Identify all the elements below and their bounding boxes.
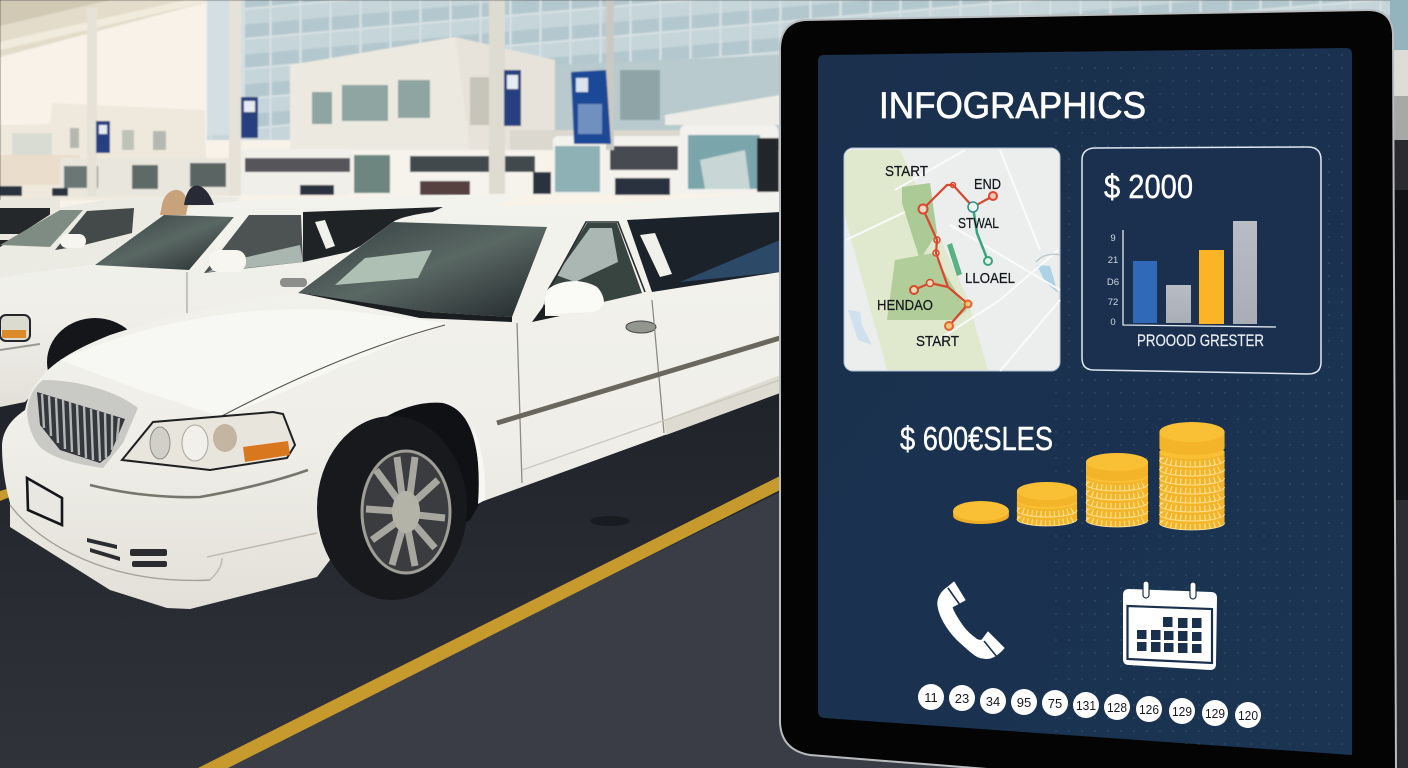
side mirror (542, 281, 604, 315)
tablet screen (818, 48, 1352, 755)
calendar date badges: 75 (1048, 696, 1062, 711)
calendar date badges: 131 (1076, 698, 1096, 713)
blue wayfinding signs (96, 70, 611, 153)
tablet frame (780, 10, 1396, 768)
coin stack 3 (1086, 453, 1148, 527)
map labels: HENDAO (877, 297, 933, 314)
map labels: START (916, 333, 959, 350)
y axis labels: 21 (1108, 255, 1118, 266)
y axis labels: 0 (1110, 317, 1116, 328)
chart caption: PROOOD GRESTER (1137, 331, 1264, 350)
low distant building (0, 103, 207, 200)
canopy roof (0, 0, 215, 57)
yellow kerb line (198, 476, 780, 768)
calendar date badges: 23 (955, 691, 969, 706)
white terminal block (207, 0, 780, 150)
sales heading: $ 600€SLES (900, 420, 1053, 457)
map labels (877, 163, 1015, 350)
panel: bar chart (1082, 147, 1321, 374)
calendar date badges: 129 (1172, 704, 1192, 719)
coin stack 1 (953, 501, 1009, 524)
calendar date badges (918, 684, 1261, 728)
y axis labels (1107, 233, 1119, 328)
door seams and chrome strip (497, 300, 780, 483)
calendar date badges: 34 (986, 694, 1000, 709)
lamp and sign poles (87, 0, 614, 196)
bars (1133, 221, 1257, 324)
calendar date badges: 120 (1238, 708, 1258, 723)
door handle (626, 321, 656, 333)
glass facade of terminal (207, 0, 1408, 140)
main white limousine (2, 192, 780, 609)
rear side windows (627, 212, 780, 292)
map land areas (845, 150, 1060, 371)
y axis labels: 72 (1108, 297, 1118, 308)
chart axes (1123, 230, 1276, 327)
parked limousine, middle (0, 185, 520, 407)
calendar date badges: 126 (1139, 702, 1159, 717)
windshield (298, 222, 547, 317)
icon: telephone (938, 582, 1004, 659)
front grille (27, 380, 138, 468)
parked limousine, far (0, 197, 240, 280)
calendar date badges: 128 (1107, 700, 1127, 715)
map labels: STWAL (958, 215, 999, 232)
rear body shading (664, 375, 780, 435)
headlight (122, 412, 295, 470)
hood highlight (60, 309, 445, 417)
road surface (0, 370, 1010, 768)
panel: route map (844, 148, 1060, 371)
map labels: END (974, 176, 1001, 193)
tablet device (780, 10, 1396, 768)
coin stack 2 (1017, 482, 1077, 526)
photo background: airport terminal (0, 0, 1408, 210)
chart heading: $ 2000 (1104, 168, 1193, 205)
buses in the distance (60, 125, 779, 196)
title: INFOGRAPHICS (879, 85, 1146, 126)
map labels: START (885, 163, 928, 180)
calendar date badges: 11 (924, 690, 938, 705)
coin stack 4 (1159, 422, 1225, 530)
map route (910, 182, 997, 330)
people on the kerb (0, 172, 670, 196)
wheel arch, tyre and rim (317, 403, 485, 600)
coin stacks (953, 422, 1225, 530)
front door window (547, 223, 642, 312)
icon: calendar (1123, 581, 1217, 670)
y axis labels: D6 (1107, 277, 1119, 288)
calendar date badges: 129 (1205, 706, 1225, 721)
y axis labels: 9 (1110, 233, 1116, 244)
front bumper details and licence plate (10, 470, 317, 580)
calendar date badges: 95 (1017, 695, 1031, 710)
car body (2, 192, 780, 609)
map labels: LLOAEL (965, 270, 1015, 287)
tablet right-hand backdrop (1390, 0, 1408, 768)
